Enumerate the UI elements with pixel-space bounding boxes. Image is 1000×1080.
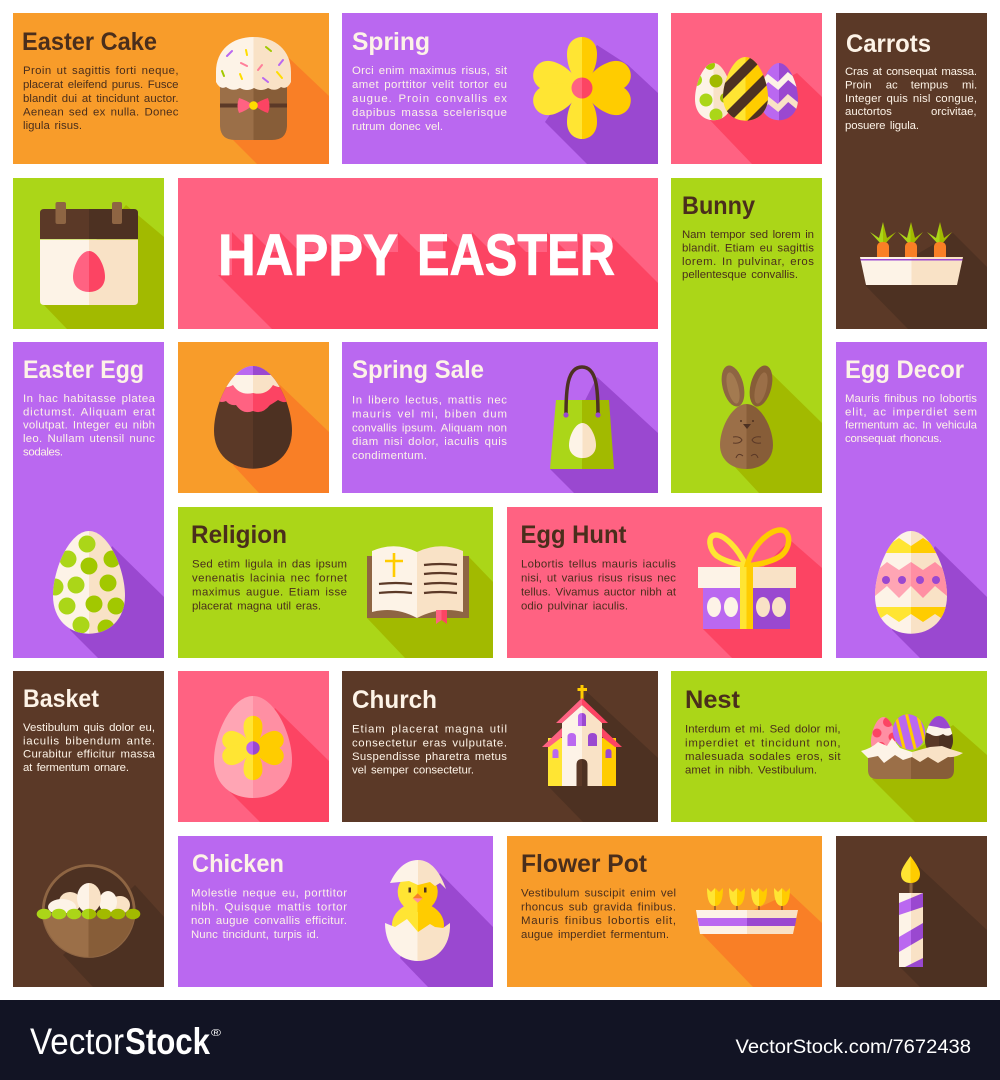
icon: carrots in a planter [860, 222, 963, 285]
text block: church: Suspendisse pharetra metus [352, 751, 507, 763]
text block: carrots: posuere ligula. [845, 120, 919, 132]
heading: bunny: Bunny [682, 192, 755, 220]
heading: easter: EASTER [417, 223, 615, 288]
panel: three eggs [671, 13, 832, 164]
text block: nest: malesuada sodales eros, sit [685, 751, 841, 763]
heading: easter cake: Easter Cake [22, 28, 157, 56]
logo: vectorstock: Vector [30, 1021, 124, 1062]
text block: carrots: Integer quis nisl congue, [845, 93, 977, 105]
panel: calendar [13, 178, 164, 329]
text block: egg hunt: nisi, ut varius risus risus nec [521, 573, 676, 585]
text block: flower pot: augue imperdiet fermentum. [521, 929, 669, 941]
text block: carrots: mi. [962, 80, 977, 92]
icon: chocolate egg [214, 366, 292, 469]
icon: calendar with egg [40, 202, 138, 305]
icon: nest with eggs [861, 712, 963, 779]
text block: easter egg: leo. Nullam utensil nunc [23, 433, 155, 445]
panel: chocolate egg [178, 342, 329, 493]
icon: three decorated eggs [695, 57, 798, 121]
heading: flower pot: Flower Pot [521, 850, 648, 878]
heading: easter egg: Easter Egg [23, 356, 144, 384]
panel: chicken [178, 836, 493, 987]
text block: flower pot [521, 887, 676, 941]
text block: spring sale: convallis ipsum. Aliquam non [352, 422, 507, 434]
text block: bunny: pellentesque convallis. [682, 269, 798, 281]
text block: bunny: blandit. Etiam eu sagittis [682, 243, 814, 255]
text block: flower pot: rhoncus sub gravida finibus. [521, 901, 676, 913]
text block: religion [192, 559, 348, 612]
text block: spring: Orci enim maximus risus, sit [352, 65, 508, 77]
text block: church: consectetur eras vulputate. [352, 737, 507, 749]
text block: egg decor: fermentum ac. In vehicula [845, 420, 978, 432]
panel: spring sale [342, 342, 658, 493]
text block: spring sale: mauris vel mi, biben dum [352, 408, 507, 420]
text block: chicken [191, 887, 347, 941]
panel: egg hunt [507, 507, 822, 658]
icon: church [542, 685, 622, 786]
text block: easter cake: blandit dui at tincidunt auctor. [23, 93, 178, 105]
text block: spring sale: In libero lectus, mattis nec [352, 394, 507, 406]
text block: easter egg [23, 393, 156, 458]
text block: egg hunt: odio pulvinar iaculis. [521, 600, 628, 612]
heading: egg decor: Egg Decor [845, 356, 964, 384]
text block: easter cake: Aenean sed ex nulla. Donec [23, 106, 179, 118]
icon: egg with flower [214, 696, 292, 798]
url: image reference: VectorStock.com/7672438 [736, 1037, 971, 1058]
text block: chicken: Molestie neque eu, porttitor [191, 887, 347, 899]
text block: easter cake: placerat eleifend purus. Fusce [23, 79, 178, 91]
text block: easter cake [23, 65, 179, 132]
heading: chicken: Chicken [192, 850, 284, 878]
footer: watermark bar [0, 1000, 1000, 1080]
logo: vectorstock [30, 1021, 222, 1062]
text block: basket: Curabitur efficitur massa [23, 749, 156, 761]
icon: hatching chick [385, 860, 450, 961]
text block: egg decor: elit, ac imperdiet sem [845, 406, 977, 418]
icon: open bible [367, 546, 469, 624]
text block: easter cake: Proin ut sagittis forti neque, [23, 65, 178, 77]
text block: egg hunt [521, 559, 677, 612]
panel: easter cake [13, 13, 329, 164]
text block: easter egg: volutpat. Integer eu nibh [23, 420, 155, 432]
text block: religion: placerat magna util eras. [192, 600, 321, 612]
text block: carrots: orcivitae, [931, 106, 977, 118]
panel: nest [671, 671, 987, 822]
heading: egg hunt: Egg Hunt [520, 521, 627, 549]
panel: church [342, 671, 658, 822]
icon: chocolate bunny [718, 363, 776, 469]
text block: spring: amet porttitor velit tortor eu [352, 79, 507, 91]
text block: religion: maximus augue. Etiam isse [192, 586, 347, 598]
heading: nest: Nest [685, 686, 741, 714]
text block: easter egg: In hac habitasse platea [23, 393, 156, 405]
text block: flower pot: Vestibulum suscipit enim vel [521, 887, 676, 899]
logo: vectorstock: Stock [125, 1021, 210, 1062]
logo: vectorstock: ® [211, 1028, 222, 1039]
text block: bunny: Nam tempor sed lorem in [682, 229, 814, 241]
panel: easter egg [13, 342, 164, 658]
icon: polka dot egg [53, 531, 125, 634]
text block: nest: amet in nibh. Vestibulum. [685, 765, 817, 777]
panel: flower egg [178, 671, 329, 822]
text block: spring: augue. Proin convallis ex [352, 93, 507, 105]
heading: carrots: Carrots [846, 30, 931, 58]
panel: religion [178, 507, 493, 658]
text block: easter cake: ligula risus. [23, 120, 82, 132]
heading: church: Church [352, 686, 437, 714]
icon: shopping bag with egg [550, 367, 614, 469]
text block: carrots: auctortos [845, 106, 892, 118]
text block: carrots: ac [886, 80, 898, 92]
text block: bunny [682, 229, 814, 281]
heading: religion: Religion [191, 521, 287, 549]
panel: egg decor [836, 342, 987, 658]
text block: spring [352, 65, 508, 133]
text block: flower pot: Mauris finibus lobortis elit, [521, 915, 676, 927]
text block: church: vel semper consectetur. [352, 765, 474, 777]
text block: basket: Vestibulum quis dolor eu, [23, 722, 155, 734]
text block: spring sale: diam nisi dolor, iaculis quis [352, 436, 507, 448]
text block: easter egg: sodales. [23, 446, 63, 458]
text block: egg hunt: Lobortis tellus mauris iaculis [521, 559, 676, 571]
heading: happy: HAPPY [218, 223, 398, 288]
text block: egg decor: Mauris finibus no lobortis [845, 393, 977, 405]
text block: church [352, 723, 507, 777]
text block: egg decor: consequat rhoncus. [845, 433, 942, 445]
text block: spring: dapibus massa scelerisque [352, 107, 507, 119]
heading: spring sale: Spring Sale [352, 356, 484, 384]
text block: carrots: tempus [911, 80, 948, 92]
icon: easter cake [216, 37, 291, 140]
panel: carrots [836, 13, 987, 329]
heading: spring: Spring [352, 28, 430, 56]
text block: easter egg: dictumst. Aliquam erat [23, 406, 156, 418]
icon: gift box with eggs [698, 530, 796, 629]
text block: carrots [845, 66, 977, 132]
text block: chicken: non augue convallis efficitur. [191, 915, 347, 927]
text block: carrots: Cras at consequat massa. [845, 66, 977, 78]
text block: religion: venenatis lacinia nec fornet [192, 573, 348, 585]
heading: basket: Basket [23, 685, 100, 713]
text block: egg hunt: tellus. Vivamus auctor nibh at [521, 586, 677, 598]
icon: tulips in a pot [696, 888, 798, 934]
icon: zigzag decorated egg [875, 531, 947, 634]
icon: striped candle [899, 856, 923, 967]
panel: bunny [671, 178, 822, 493]
panel: flower pot [507, 836, 822, 987]
text block: nest: Interdum et mi. Sed dolor mi, [685, 723, 840, 735]
panel: basket [13, 671, 164, 987]
text block: carrots: Proin [845, 80, 872, 92]
icon: basket of eggs [37, 866, 140, 957]
panel: spring [342, 13, 658, 164]
text block: church: Etiam placerat magna util [352, 723, 507, 735]
panel: happy easter banner [178, 178, 658, 329]
text block: chicken: Nunc tincidunt, turpis id. [191, 929, 319, 941]
text block: nest [685, 723, 841, 777]
text block: basket [23, 722, 156, 774]
text block: spring sale [352, 394, 507, 462]
text block: bunny: lorem. In pulvinar, eros [682, 256, 814, 268]
text block: spring sale: condimentum. [352, 450, 427, 462]
icon: flower [529, 37, 635, 139]
text block: basket: at fermentum ornare. [23, 762, 129, 774]
text block: basket: iaculis bibendum ante. [23, 735, 155, 747]
text block: spring: rutrum donec vel. [352, 121, 443, 133]
text block: chicken: nibh. Quisque mattis tortor [191, 901, 347, 913]
text block: religion: Sed etim ligula in das ipsum [192, 559, 347, 571]
panel: candle [836, 836, 987, 987]
text block: egg decor [845, 393, 978, 445]
text block: nest: imperdiet et tincidunt non, [685, 737, 840, 749]
